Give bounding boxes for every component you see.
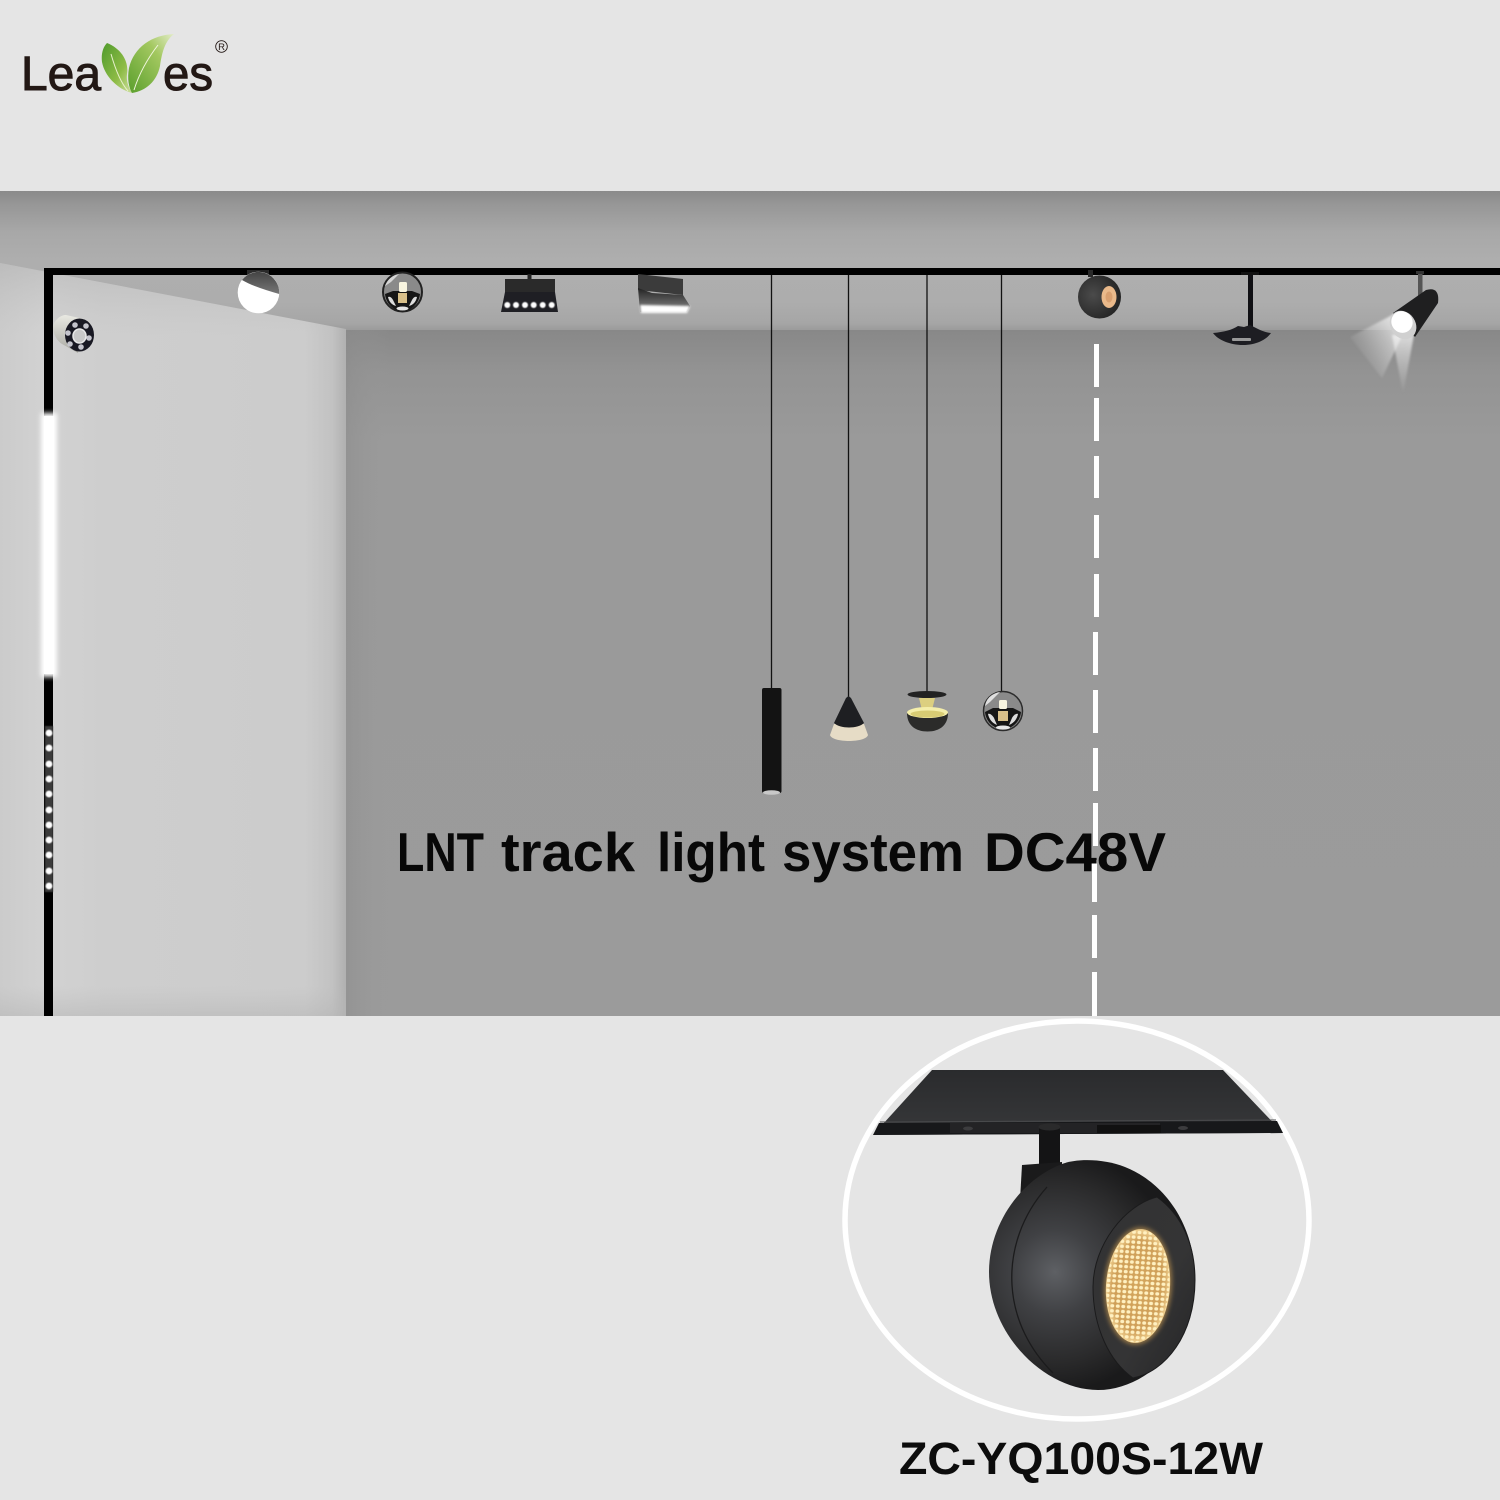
lamp: umbrella pendant (1213, 272, 1271, 345)
registered mark (216, 41, 227, 53)
wall dot light strip (45, 726, 53, 892)
title: track (501, 821, 635, 883)
white ellipse frame (845, 1021, 1309, 1419)
glowing honeycomb lens (1100, 1225, 1176, 1347)
track rail (41, 268, 1500, 1016)
light beam (1350, 313, 1414, 394)
lamp: angled wash light (638, 274, 690, 313)
lamp: cylinder spot with beam (1350, 271, 1438, 394)
logo: Leaves: Lea (21, 47, 101, 101)
lamp: small ball spot (1078, 270, 1121, 318)
lamp: half white globe (238, 270, 279, 313)
ball housing (989, 1160, 1195, 1390)
icon: left leaf (102, 43, 132, 93)
title (397, 821, 1166, 883)
pendant: cone (830, 275, 868, 741)
title: DC48V (984, 821, 1166, 883)
dashed leader line (1092, 344, 1099, 1016)
back wall (346, 330, 1500, 1016)
registered mark: R (218, 42, 225, 53)
pendant: cylinder (762, 275, 782, 795)
ceiling (0, 191, 1500, 330)
bracket (1020, 1162, 1062, 1200)
logo: Leaves: es (163, 47, 213, 101)
title: light (657, 821, 765, 883)
logo: Leaves (21, 34, 227, 101)
model label: ZC-YQ100S-12W (899, 1433, 1264, 1484)
title: system (782, 821, 964, 883)
lamp: glass globe (383, 272, 422, 312)
track section (873, 1070, 1283, 1135)
wall strip light (41, 413, 57, 677)
left wall (0, 263, 346, 1016)
title: LNT (397, 821, 484, 883)
icon: right leaf (128, 34, 174, 93)
pendant lamps (762, 275, 1022, 795)
product callout circle (845, 1021, 1309, 1419)
pendant: glass globe (984, 275, 1022, 730)
pendant: dome (907, 275, 948, 732)
room scene (0, 191, 1500, 1016)
lamp: linear spot array (501, 274, 558, 312)
wall spot light (53, 315, 94, 353)
stem (1038, 1124, 1060, 1167)
